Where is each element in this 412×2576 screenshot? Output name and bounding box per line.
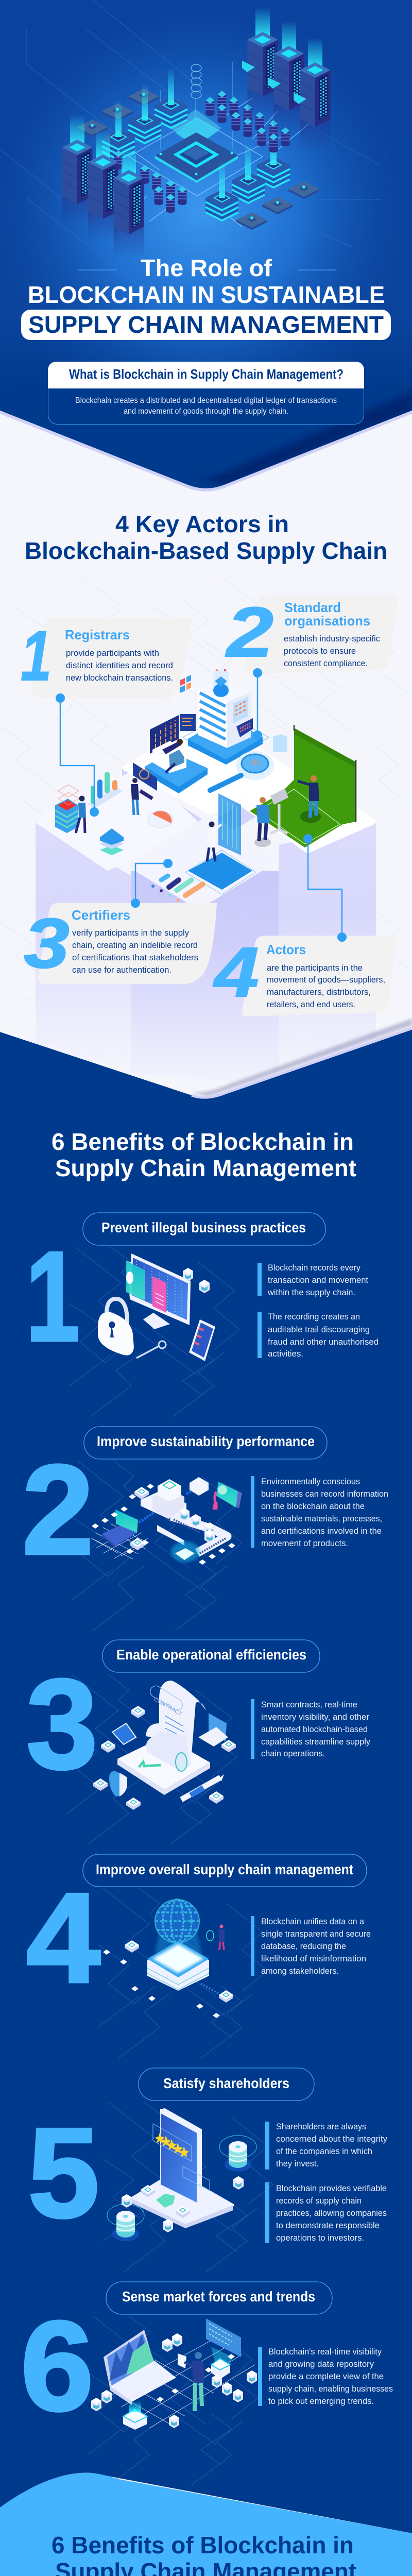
panel: 4 key actors section (0, 411, 412, 1097)
heading (52, 1128, 356, 1181)
title (21, 255, 391, 340)
callout 2: standard organisations: Standard (284, 600, 341, 615)
text block: to demonstrate responsible (276, 2221, 380, 2230)
text block: Environmentally conscious (261, 1477, 360, 1486)
key (136, 1341, 166, 1358)
person standing (298, 775, 319, 818)
callout 2: standard organisations: organisations (284, 613, 370, 629)
illustration: globe over data cube (103, 1900, 233, 2018)
text block: Shareholders are always (276, 2122, 366, 2131)
data blocks tile (151, 876, 203, 902)
server building (183, 669, 269, 765)
benefit 2: improve sustainability performance (22, 1427, 388, 1631)
benefit 1: prevent illegal business practices (26, 1213, 379, 1417)
illustration: smart contract (93, 1681, 236, 1810)
callout 1: registrars (21, 617, 192, 698)
text block (251, 1916, 371, 1976)
heading: 4 Key Actors in (115, 511, 289, 537)
heading: 6 Benefits of Blockchain in (52, 2532, 354, 2558)
callout 2: standard organisations (225, 593, 398, 674)
illustration: isometric supply chain platforms (36, 669, 376, 1084)
text block (265, 2182, 387, 2243)
callout 3: certifiers: can use for authentication. (72, 965, 171, 975)
text block (258, 1312, 379, 1359)
callout 3: certifiers: Certifiers (72, 907, 130, 923)
heading: Blockchain-Based Supply Chain (25, 537, 387, 564)
database coin left (107, 2204, 144, 2241)
analyst (178, 2352, 204, 2411)
text block: among stakeholders. (261, 1966, 339, 1976)
benefit 5: satisfy shareholders (28, 2068, 387, 2272)
text block: likelihood of misinformation (261, 1954, 366, 1963)
text block: fraud and other unauthorised (268, 1337, 379, 1347)
panel: what is blockchain definition box (48, 362, 364, 425)
text block: chain operations. (261, 1749, 325, 1758)
benefit 3: enable operational efficiencies (26, 1640, 370, 1844)
text block: The recording creates an (268, 1312, 360, 1321)
phone (189, 1319, 215, 1361)
text block: movement of products. (261, 1538, 348, 1548)
panel: what is blockchain definition box: What is Blockchain in Supply Chain Management? (69, 366, 344, 382)
icon: layered node stacks (102, 68, 290, 222)
text block: Smart contracts, real-time (261, 1700, 357, 1709)
text block: concerned about the integrity (276, 2134, 387, 2144)
number: 4 (26, 1866, 100, 2009)
icon: data coin stack (161, 62, 232, 149)
text block: of the companies in which (276, 2146, 372, 2156)
text block: Blockchain unifies data on a (261, 1917, 365, 1926)
person at circuit screen (185, 793, 256, 894)
icon: miniature servers (114, 91, 289, 213)
magnifying glass (210, 751, 274, 790)
panel: what is blockchain definition box: and movement of goods through the supply chain. (124, 407, 288, 416)
benefit pill: Improve overall supply chain management (96, 1861, 353, 1877)
callout 3: certifiers: of certifications that stakeholders (72, 953, 198, 962)
hologram panel (206, 2318, 241, 2365)
benefit 4: improve overall supply chain management (26, 1854, 371, 2058)
text block (258, 2347, 393, 2406)
text block: provide a complete view of the (268, 2371, 384, 2381)
text block: Blockchain records every (268, 1263, 360, 1273)
platform top surfaces (39, 719, 373, 907)
text block: businesses can record information (261, 1489, 388, 1499)
title: BLOCKCHAIN IN SUSTAINABLE (28, 281, 385, 308)
callout 4: actors: movement of goods—suppliers, (267, 975, 385, 985)
platform columns (36, 768, 376, 1084)
number: 3 (26, 1652, 98, 1795)
bar chart tile (88, 772, 123, 809)
heading: 6 Benefits of Blockchain in (52, 1128, 354, 1155)
number: 1 (26, 1225, 80, 1368)
heading (25, 511, 387, 564)
illustration: monitor, lock, key and phone (98, 1253, 215, 1361)
benefit pill: Improve sustainability performance (97, 1433, 315, 1449)
panel: second 6 benefits section (0, 2473, 412, 2576)
text block: Blockchain's real-time visibility (268, 2347, 382, 2357)
benefit pill: Prevent illegal business practices (101, 1219, 306, 1235)
icon: central processor chip (155, 132, 238, 183)
text block: and growing data repository (268, 2359, 374, 2369)
illustration: smart contract: CONTRACT (152, 1696, 183, 1717)
layered blocks (100, 828, 124, 855)
text block: activities. (268, 1349, 303, 1359)
benefit pill (83, 1854, 367, 1887)
callout 3: certifiers (24, 903, 217, 984)
callout 1: registrars: provide participants with (66, 648, 159, 658)
callout 2: standard organisations: consistent compliance. (284, 658, 368, 668)
database coin right (219, 2136, 256, 2172)
text block: transaction and movement (268, 1275, 368, 1285)
illustration: phone with star ratings (107, 2108, 256, 2241)
illustration: sustainable factory conveyor (91, 1477, 242, 1565)
green screen studio (250, 725, 356, 848)
benefit pill (139, 2068, 314, 2100)
text block: operations to investors. (276, 2233, 364, 2243)
text block: they invest. (276, 2159, 319, 2168)
callout 3: certifiers: verify participants in the supply (72, 928, 189, 938)
callout 2: standard organisations: 2 (225, 593, 273, 672)
text block: to pick out emerging trends. (268, 2396, 374, 2406)
callout 1: registrars: new blockchain transactions. (66, 673, 173, 683)
analyst at panel (131, 762, 157, 815)
benefit pill: Satisfy shareholders (163, 2075, 289, 2091)
text block: automated blockchain-based (261, 1724, 368, 1734)
text block: practices, allowing companies (276, 2208, 387, 2218)
text block (251, 1476, 388, 1548)
small person (207, 1925, 225, 1950)
callout 4: actors: manufacturers, distributors, (267, 987, 371, 997)
callout 4: actors: are the participants in the (267, 963, 363, 973)
callout 1: registrars: Registrars (65, 627, 130, 642)
number: 6 (21, 2294, 94, 2437)
callout 2: standard organisations: establish industry-specific (284, 634, 380, 643)
benefit pill (102, 1640, 320, 1672)
callout 3: certifiers: chain, creating an indelible record (72, 940, 198, 950)
text block: records of supply chain (276, 2196, 362, 2206)
benefit pill: Sense market forces and trends (122, 2289, 315, 2304)
text block: on the blockchain about the (261, 1501, 365, 1511)
text block: inventory visibility, and other (261, 1712, 369, 1722)
title: SUPPLY CHAIN MANAGEMENT (28, 311, 384, 338)
benefit 6: sense market forces and trends (21, 2282, 393, 2486)
callout 2: standard organisations: protocols to ensure (284, 646, 356, 656)
text block: and certifications involved in the (261, 1526, 382, 1536)
panel: 6 benefits section (0, 1028, 412, 2533)
icon: server towers right (242, 7, 331, 150)
connector lines with dots (56, 668, 347, 942)
red data cube and analyst (55, 785, 86, 833)
number: 2 (22, 1438, 94, 1581)
text block: sustainable materials, processes, (261, 1514, 382, 1523)
icon: glowing hologram above chip (170, 109, 221, 147)
illustration: isometric blockchain network (62, 7, 331, 258)
callout 1: registrars: 1 (21, 617, 52, 696)
text block: Blockchain provides verifiable (276, 2183, 387, 2193)
text block: supply chain, enabling businesses (268, 2384, 393, 2394)
text block: within the supply chain. (267, 1287, 355, 1297)
panel: hero header (0, 0, 412, 488)
text block: capabilities streamline supply (261, 1737, 370, 1747)
padlock (98, 1299, 134, 1355)
text block (251, 1699, 370, 1759)
heading: Supply Chain Management (55, 1155, 356, 1181)
benefit pill (106, 2282, 332, 2314)
icon: server towers left (62, 115, 144, 258)
number: 5 (28, 2101, 99, 2244)
text block: auditable trail discouraging (268, 1325, 370, 1334)
callout 4: actors: Actors (266, 942, 306, 957)
callout 4: actors: 4 (213, 933, 259, 1012)
text block: single transparent and secure (261, 1929, 371, 1939)
benefit pill (83, 1213, 325, 1245)
icon: data tiles (77, 89, 319, 230)
text block: database, reducing the (261, 1941, 346, 1951)
heading (52, 2532, 356, 2576)
callout 4: actors (213, 933, 396, 1016)
benefit pill (84, 1427, 327, 1459)
pie chart (148, 811, 173, 827)
text block (258, 1263, 368, 1297)
icon: colour tile cluster (180, 675, 191, 693)
callout 4: actors: retailers, and end users. (267, 999, 355, 1009)
callout 1: registrars: distinct identities and record (66, 660, 173, 670)
text block (265, 2122, 387, 2170)
panel: what is blockchain definition box: Blockchain creates a distributed and decentralised digital ledger of transactions (75, 396, 337, 405)
camera operator (254, 788, 288, 847)
developer at workstation (145, 714, 208, 793)
illustration: laptop, analyst and data grid (91, 2318, 257, 2430)
teal screen and person (214, 1482, 242, 1510)
benefit pill: Enable operational efficiencies (116, 1647, 306, 1663)
title: The Role of (141, 255, 272, 281)
laptop on grid (91, 1510, 148, 1559)
callout 3: certifiers: 3 (24, 904, 70, 983)
